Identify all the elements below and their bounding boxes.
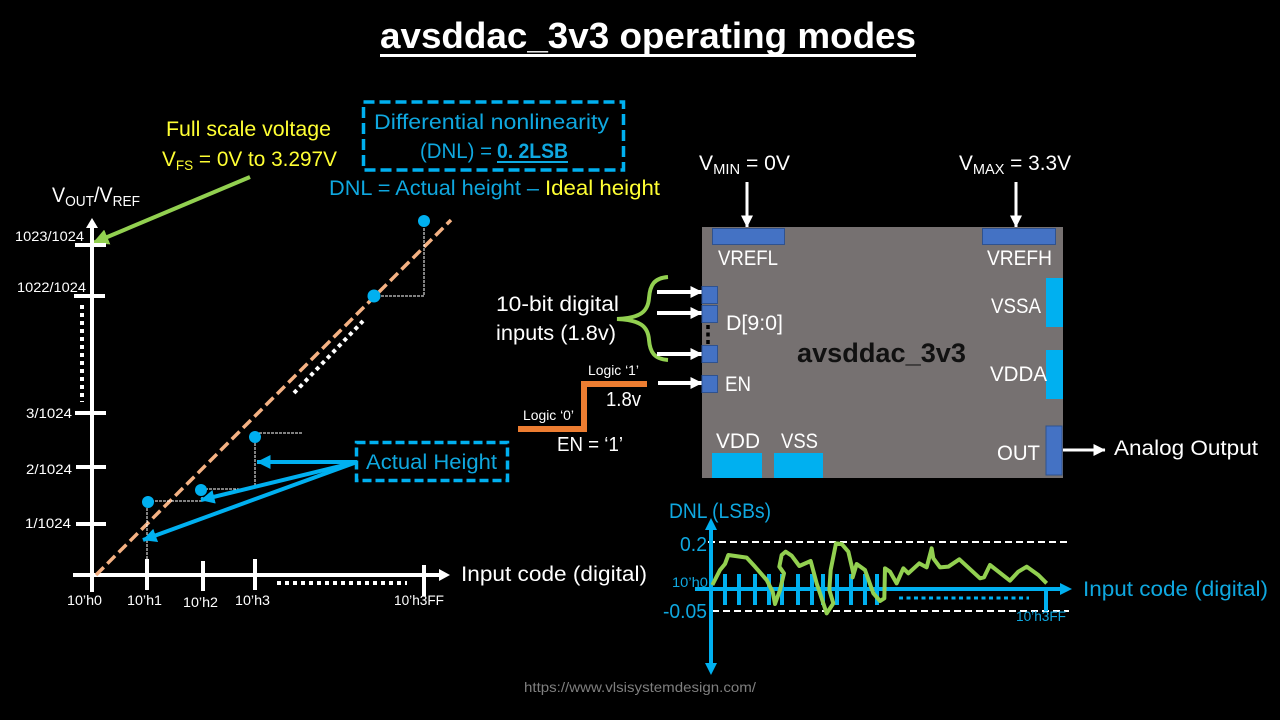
supply labels and arrows: = 3.3V xyxy=(1004,151,1072,175)
arrows: actual height xyxy=(143,462,357,540)
DNL labels: DNL (LSBs) xyxy=(669,499,771,523)
EN step signal: Logic ‘0’ xyxy=(523,407,574,423)
input arrows xyxy=(657,292,702,383)
chip pads xyxy=(702,228,1062,475)
chip pin labels: VREFH xyxy=(987,246,1052,270)
chart: transfer curve xyxy=(15,183,647,610)
x axis labels: 10’h2 xyxy=(183,594,218,610)
y axis labels: 1023/1024 xyxy=(15,228,84,244)
DNL labels: Input code (digital) xyxy=(1083,577,1268,601)
DNL ticks xyxy=(725,574,1046,611)
EN step signal: 1.8v xyxy=(606,389,641,411)
x axis labels: 10’h3 xyxy=(235,592,270,608)
step guides xyxy=(147,228,424,560)
brace xyxy=(617,277,668,360)
supply labels and arrows: = 0V xyxy=(740,151,791,175)
chip pin labels: VREFL xyxy=(718,246,778,270)
DNL formula: Ideal height xyxy=(545,176,660,200)
chip name: avsddac_3v3 xyxy=(797,338,966,368)
y axis xyxy=(74,218,106,592)
DNL dotted continuation xyxy=(899,596,1029,600)
arrow: full scale to 1023/1024 xyxy=(93,177,250,243)
DNL formula: DNL = Actual height – xyxy=(329,176,539,200)
axis title: VOUT/VREF: V xyxy=(52,183,66,207)
supply labels and arrows: V xyxy=(699,151,713,175)
chart: DNL xyxy=(663,499,1268,675)
x axis labels: 10’h3FF xyxy=(394,592,444,608)
callout: actual height: Actual Height xyxy=(366,450,497,474)
x axis xyxy=(73,559,450,596)
x axis labels xyxy=(67,592,444,610)
DNL labels xyxy=(663,499,1268,624)
supply labels and arrows: V xyxy=(959,151,973,175)
callout: differential nonlinearity: Differential nonlinearity xyxy=(374,110,609,134)
source URL: https://www.vlsisystemdesign.com/ xyxy=(524,679,756,695)
callout: differential nonlinearity: (DNL) = xyxy=(420,139,492,163)
power pads xyxy=(712,278,1063,478)
block: avsddac_3v3 chip xyxy=(702,227,1063,478)
chip pin labels: D[9:0] xyxy=(726,311,783,335)
callout: full scale voltage: V xyxy=(162,147,176,171)
supply labels and arrows xyxy=(699,151,1072,227)
supply labels and arrows: MIN xyxy=(713,161,740,178)
chip pin labels: VDD xyxy=(716,429,760,453)
chip pin labels: EN xyxy=(725,372,751,396)
EN step signal: EN = ‘1’ xyxy=(557,434,623,456)
callout: full scale voltage: = 0V to 3.297V xyxy=(193,147,338,171)
callout: full scale voltage xyxy=(162,117,338,173)
DNL labels: -0.05 xyxy=(663,601,707,623)
y axis labels: 3/1024 xyxy=(26,405,72,421)
y axis labels: 2/1024 xyxy=(26,461,72,477)
DNL formula xyxy=(329,176,660,200)
title: avsddac_3v3 operating modes xyxy=(380,15,916,56)
DNL limits xyxy=(708,542,1069,611)
callout: differential nonlinearity xyxy=(364,102,624,170)
callout: actual height xyxy=(356,442,508,480)
y axis labels: 1022/1024 xyxy=(17,279,86,295)
x axis title: Input code (digital) xyxy=(461,562,647,586)
callout: full scale voltage: FS xyxy=(176,157,193,173)
chip pin labels: VSS xyxy=(781,429,818,453)
label: 10-bit digital inputs: inputs (1.8v) xyxy=(496,321,616,345)
ideal line xyxy=(96,220,451,575)
y axis labels: 1/1024 xyxy=(25,515,71,531)
chip pin labels: OUT xyxy=(997,441,1040,465)
callout: differential nonlinearity: 0. 2LSB xyxy=(497,139,568,163)
x axis labels: 10’h1 xyxy=(127,592,162,608)
EN step signal: Logic ‘1’ xyxy=(588,362,639,378)
DNL labels: 10’h0 xyxy=(672,574,708,590)
y axis labels xyxy=(15,228,86,531)
label: 10-bit digital inputs: 10-bit digital xyxy=(496,292,619,316)
DNL labels: 0.2 xyxy=(680,534,707,556)
EN step signal xyxy=(518,362,647,456)
label: 10-bit digital inputs xyxy=(496,292,619,345)
DNL labels: 10’h3FF xyxy=(1016,608,1066,624)
x axis labels: 10’h0 xyxy=(67,592,102,608)
data bus dots xyxy=(706,325,710,344)
data points xyxy=(142,215,430,508)
DNL curve xyxy=(712,543,1047,613)
axis title: VOUT/VREF: /V xyxy=(94,183,113,207)
chip pin labels: VSSA xyxy=(991,294,1042,318)
supply labels and arrows: MAX xyxy=(973,161,1004,178)
chip pin labels: VDDA xyxy=(990,362,1048,386)
DNL axes xyxy=(695,518,1072,675)
analog output: Analog Output xyxy=(1114,436,1258,460)
dotted continuation xyxy=(294,321,363,393)
axis title: VOUT/VREF: REF xyxy=(113,193,140,210)
axis title: VOUT/VREF: OUT xyxy=(65,193,94,210)
chip pin labels xyxy=(716,246,1052,465)
callout: full scale voltage: Full scale voltage xyxy=(166,117,331,141)
